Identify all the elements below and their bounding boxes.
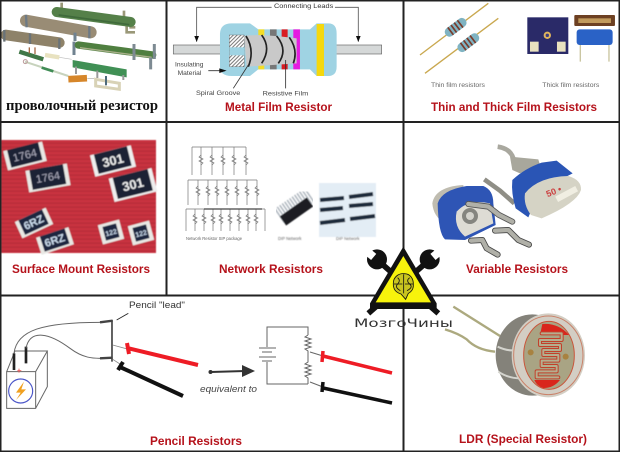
black probe bbox=[118, 362, 183, 396]
wirewound resistors photo bbox=[4, 3, 154, 89]
logo wordmark: МозгоЧины bbox=[354, 316, 453, 330]
surface mount photo: 1764 bbox=[35, 170, 61, 186]
surface mount photo: 6RZ bbox=[22, 213, 46, 233]
red probe bbox=[127, 343, 198, 365]
thin and thick film components: Thin film resistors bbox=[431, 83, 485, 89]
metal film diagram: Connecting Leads bbox=[274, 3, 334, 10]
surface mount photo: 122 bbox=[135, 230, 148, 239]
black probe right bbox=[322, 382, 392, 403]
surface mount photo: 6RZ bbox=[43, 232, 67, 250]
panel: surface mount bbox=[1, 124, 165, 294]
variable resistor photo bbox=[432, 147, 581, 255]
surface mount photo: 122 bbox=[105, 229, 118, 238]
panel: metal film resistor bbox=[168, 1, 402, 121]
thin and thick film components bbox=[420, 3, 615, 89]
label: equivalent to: equivalent to bbox=[200, 384, 257, 394]
label: pencil lead: Pencil "lead" bbox=[129, 300, 185, 311]
caption: surface mount: Surface Mount Resistors bbox=[12, 262, 150, 276]
panel: LDR bbox=[405, 297, 618, 450]
logo wrenches bbox=[362, 247, 444, 313]
panel: thin and thick film bbox=[405, 1, 618, 121]
metal film diagram: Insulating bbox=[175, 62, 204, 69]
panel: variable resistors bbox=[405, 124, 618, 294]
red probe right bbox=[322, 351, 392, 373]
metal film diagram: Resistive Film bbox=[263, 90, 309, 97]
variable resistor photo: 50 • bbox=[545, 184, 563, 199]
LDR photo bbox=[445, 307, 585, 397]
surface mount photo bbox=[1, 140, 157, 255]
logo brain bbox=[393, 274, 413, 299]
caption: metal film: Metal Film Resistor bbox=[225, 100, 332, 114]
caption: LDR: LDR (Special Resistor) bbox=[459, 432, 587, 446]
metal film diagram: Spiral Groove bbox=[196, 90, 241, 97]
arrow: equivalent bbox=[208, 365, 255, 377]
caption: pencil: Pencil Resistors bbox=[150, 434, 242, 448]
panel: pencil resistors bbox=[1, 297, 402, 450]
logo: MozgoChiny bbox=[354, 247, 453, 330]
equivalent circuit bbox=[259, 327, 323, 387]
schematic caption: Network Resistor SIP package bbox=[186, 236, 243, 241]
surface mount photo: 301 bbox=[121, 175, 145, 194]
panel: wirewound resistor bbox=[1, 1, 165, 121]
caption: network: Network Resistors bbox=[219, 262, 323, 276]
DIP network photo bbox=[319, 183, 376, 241]
surface mount photo: 1764 bbox=[12, 147, 38, 165]
wires and pencil lead bbox=[14, 313, 128, 364]
DIP network photo: DIP Network bbox=[336, 236, 360, 241]
metal film diagram bbox=[173, 3, 382, 97]
network schematic bbox=[186, 147, 265, 231]
caption: thin and thick film: Thin and Thick Film Resistors bbox=[431, 100, 597, 114]
panel: network resistors bbox=[168, 124, 402, 294]
DIP chip bbox=[278, 194, 311, 241]
caption: variable: Variable Resistors bbox=[466, 262, 568, 276]
DIP chip: DIP Network bbox=[278, 236, 302, 241]
battery bbox=[7, 347, 47, 408]
thin and thick film components: Thick film resistors bbox=[542, 83, 599, 89]
logo triangle bbox=[370, 247, 437, 309]
metal film diagram: Material bbox=[178, 70, 202, 77]
caption: wirewound: проволочный резистор bbox=[6, 98, 158, 114]
surface mount photo: 301 bbox=[101, 151, 125, 170]
